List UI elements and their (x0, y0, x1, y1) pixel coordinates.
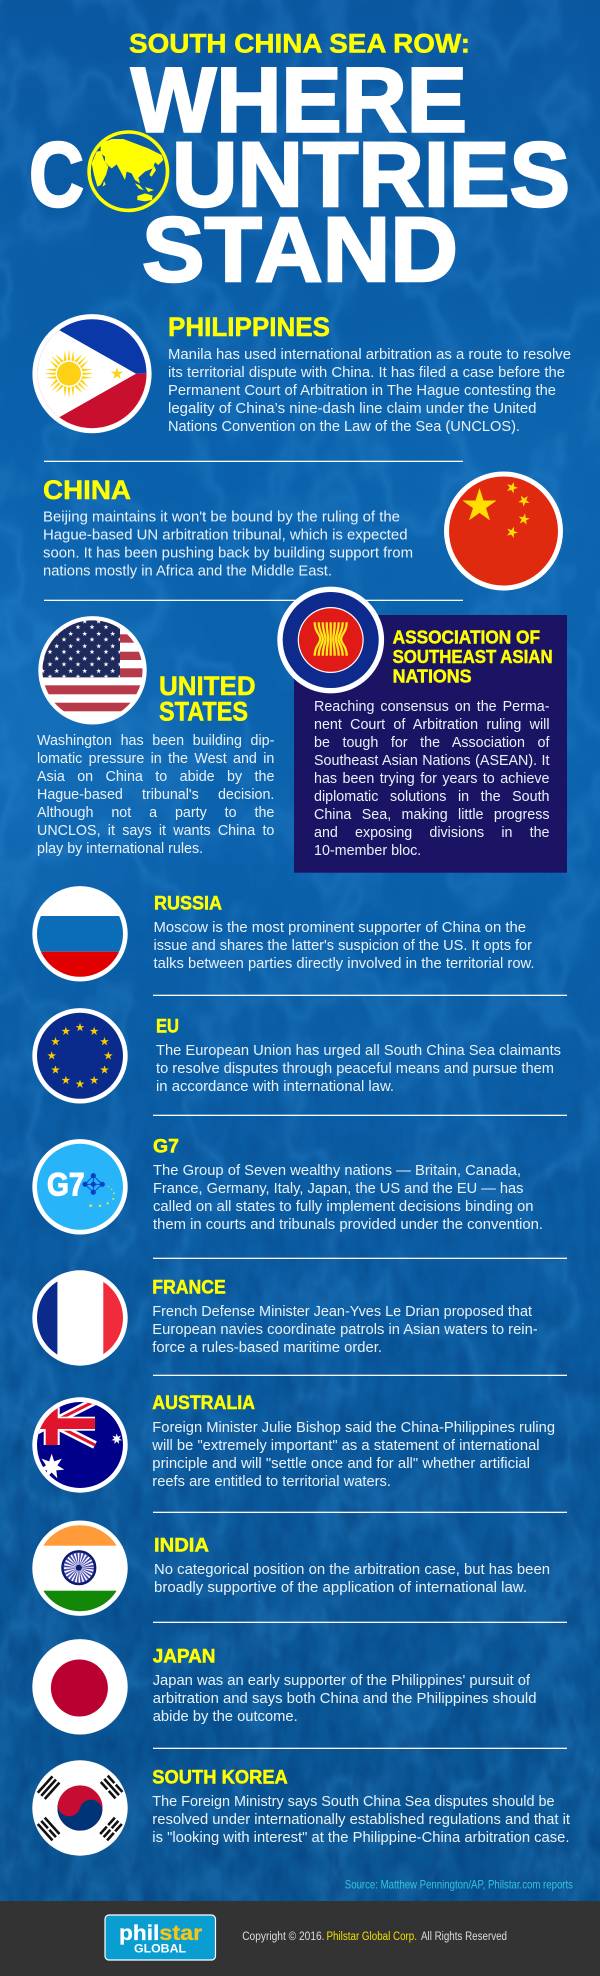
text: australia: will be "extremely important" as a statement of international (151, 1437, 540, 1454)
text: asean: Southeast Asian Nations (ASEAN). It (314, 753, 550, 769)
flag: philippines (32, 314, 152, 434)
heading: philippines: PHILIPPINES (168, 312, 330, 342)
heading: india: INDIA (154, 1535, 209, 1557)
footer (0, 1901, 600, 1976)
heading: australia: AUSTRALIA (152, 1392, 255, 1414)
panel: united states (38, 616, 256, 727)
text: japan (153, 1672, 536, 1725)
text: france (152, 1303, 538, 1356)
text: asean: and exposing divisions in the (314, 825, 550, 841)
logo: asean (277, 587, 384, 693)
text: china: nations mostly in Africa and the Middle East. (43, 563, 332, 580)
heading: asean: ASSOCIATION OF (393, 626, 540, 647)
title word: where: WHERE (131, 50, 467, 152)
text: australia: principle and will "settle once and for all" whether artificial (152, 1455, 530, 1472)
text: philippines: its territorial dispute with China. It has filed a case before the (168, 364, 565, 381)
text: india (154, 1561, 550, 1596)
heading: japan: JAPAN (153, 1645, 216, 1667)
copyright: Copyright © 2016. (242, 1931, 324, 1943)
heading: asean: SOUTHEAST ASIAN (393, 646, 553, 667)
panel: g7 (32, 1136, 543, 1235)
text: russia: talks between parties directly involved in the territorial row. (154, 955, 534, 972)
logo: philstar global: GLOBAL (134, 1944, 186, 1956)
text: russia: issue and shares the latter's suspicion of the US. It opts for (154, 937, 532, 954)
copyright: All Rights Reserved (421, 1931, 507, 1943)
heading: china: CHINA (43, 475, 131, 505)
flag: india (30, 1518, 130, 1619)
panel: japan (32, 1639, 537, 1735)
heading: france: FRANCE (152, 1276, 226, 1298)
text: philippines: Nations Convention on the Law of the Sea (UNCLOS). (168, 418, 520, 435)
text: united states (37, 733, 274, 857)
text: united states: Although not a party to the (37, 805, 274, 821)
copyright (242, 1931, 507, 1943)
text: asean: diplomatic solutions in the South (314, 789, 550, 805)
text: philippines: Permanent Court of Arbitration in The Hague contesting the (168, 382, 556, 399)
text: asean: has been trying for years to achieve (314, 771, 550, 787)
panel: france (30, 1268, 538, 1368)
title (29, 28, 570, 301)
text: china: Hague-based UN arbitration tribunal, which is expected (43, 527, 408, 544)
text: japan: arbitration and says both China and the Philippines should (153, 1690, 536, 1707)
text: australia: reefs are entitled to territorial waters. (152, 1473, 391, 1490)
text: australia: Foreign Minister Julie Bishop said the China-Philippines ruling (152, 1419, 555, 1436)
text: australia (151, 1419, 555, 1490)
logo: philstar global: phil (119, 1921, 159, 1945)
text: philippines: Manila has used international arbitration as a route to resolve (168, 346, 571, 363)
text: united states: Asia on China to abide by the (37, 769, 274, 785)
text: asean: 10-member bloc. (314, 843, 421, 859)
panel: russia (30, 886, 534, 982)
heading: g7: G7 (153, 1136, 179, 1158)
heading: asean (393, 626, 553, 687)
heading: united states: UNITED (159, 671, 256, 701)
text: g7: called on all states to fully implement decisions binding on (153, 1198, 534, 1215)
panel: eu (32, 1008, 561, 1104)
flag: australia (32, 1397, 128, 1493)
heading: united states (159, 671, 256, 727)
heading: asean: NATIONS (393, 666, 472, 687)
flag: russia (30, 886, 130, 982)
logo: g7: G7 (47, 1166, 84, 1202)
heading: south korea: SOUTH KOREA (152, 1766, 288, 1788)
panel background (294, 615, 567, 873)
text: south korea: resolved under internationally established regulations and that it (152, 1811, 571, 1828)
logo: philstar global: star (159, 1921, 203, 1945)
flag: china (444, 472, 563, 590)
panel: south korea (32, 1760, 571, 1856)
heading: eu: EU (156, 1016, 179, 1038)
copyright: Philstar Global Corp. (326, 1931, 417, 1943)
heading: united states: STATES (159, 697, 248, 727)
panel: india (30, 1518, 550, 1619)
text: asean: be tough for the Association of (314, 735, 550, 751)
text: asean: China Sea, making little progress (314, 807, 550, 823)
flag: japan (32, 1639, 128, 1735)
icon: yellow globe (89, 132, 168, 210)
title kicker: SOUTH CHINA SEA ROW: (129, 28, 470, 58)
text: south korea: The Foreign Ministry says South China Sea disputes should be (152, 1793, 555, 1810)
text: france: force a rules-based maritime order. (152, 1339, 382, 1356)
text: france: European navies coordinate patrols in Asian waters to rein- (152, 1321, 538, 1338)
text: eu: to resolve disputes through peaceful means and pursue them (156, 1060, 554, 1077)
panel: philippines (32, 312, 571, 435)
panel: australia (8, 1392, 555, 1495)
text: russia: Moscow is the most prominent supporter of China on the (154, 919, 526, 936)
text: south korea: is "looking with interest" at the Philippine-China arbitration case. (152, 1829, 570, 1846)
text: eu: The European Union has urged all South China Sea claimants (156, 1042, 561, 1059)
flag: united states (38, 616, 147, 724)
panel: asean (277, 587, 567, 873)
heading: russia: RUSSIA (154, 892, 222, 914)
text: japan: abide by the outcome. (153, 1708, 298, 1725)
text: russia (154, 919, 534, 972)
text: india: No categorical position on the arbitration case, but has been (154, 1561, 550, 1578)
text: philippines: legality of China’s nine-dash line claim under the United (168, 400, 536, 417)
text: asean: Reaching consensus on the Perma- (314, 699, 550, 715)
text: g7 (153, 1162, 543, 1233)
logo: philstar global (105, 1915, 216, 1960)
text: china: Beijing maintains it won't be bound by the ruling of the (43, 509, 400, 526)
flag: eu (32, 1008, 128, 1104)
title word: stand: STAND (142, 199, 458, 301)
text: g7: France, Germany, Italy, Japan, the US and the EU — has (153, 1180, 524, 1197)
text: asean: nent Court of Arbitration ruling will (314, 717, 550, 733)
title word: countries: UNTRIES (172, 124, 570, 226)
text: south korea (152, 1793, 571, 1846)
text: china (43, 509, 413, 580)
footer bar (0, 1901, 600, 1976)
text: united states: UNCLOS, it says it wants China to (37, 823, 274, 839)
text: india: broadly supportive of the application of international law. (154, 1579, 527, 1596)
text: united states: lomatic pressure in the West and in (37, 751, 274, 767)
text: eu: in accordance with international law. (156, 1078, 394, 1095)
text: france: French Defense Minister Jean-Yves Le Drian proposed that (152, 1303, 533, 1320)
text: asean (314, 699, 550, 859)
text: eu (156, 1042, 561, 1095)
title word: countries: C (29, 124, 84, 226)
title word: countries: O (95, 124, 161, 226)
flag: south korea (32, 1760, 128, 1856)
logo: g7 (32, 1139, 128, 1234)
text: g7: them in courts and tribunals provided under the convention. (153, 1216, 543, 1233)
panel: china (43, 472, 563, 590)
text: united states: Washington has been building dip- (37, 733, 274, 749)
text: philippines (168, 346, 571, 435)
text: united states: Hague-based tribunal's decision. (37, 787, 274, 803)
text: japan: Japan was an early supporter of the Philippines' pursuit of (153, 1672, 531, 1689)
text: united states: play by international rules. (37, 841, 203, 857)
flag: france (30, 1268, 130, 1368)
text: g7: The Group of Seven wealthy nations — Britain, Canada, (153, 1162, 521, 1179)
text: china: soon. It has been pushing back by building support from (43, 545, 413, 562)
